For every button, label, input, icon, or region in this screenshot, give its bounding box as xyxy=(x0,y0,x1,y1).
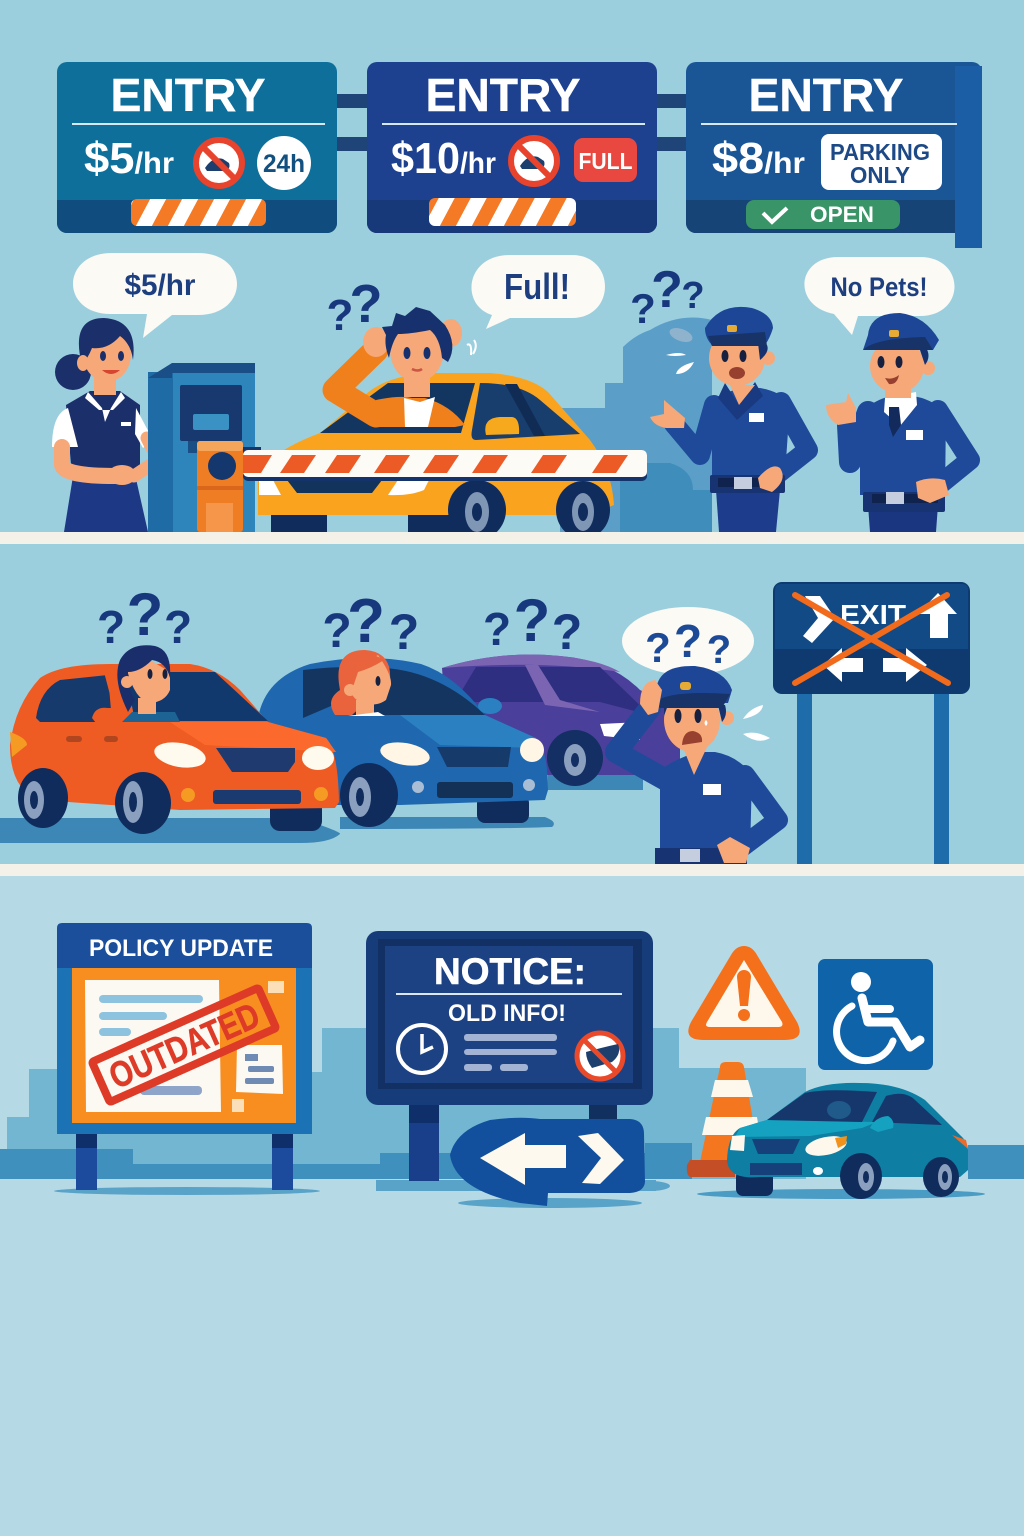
speech bubble: $5/hr xyxy=(73,253,237,338)
speech bubble: Full! xyxy=(471,255,605,329)
guard one xyxy=(650,307,808,532)
confused guard xyxy=(616,666,778,864)
question marks over driver: ? xyxy=(350,274,382,334)
orange car xyxy=(10,664,339,834)
notice board: OLD INFO! xyxy=(448,1000,566,1027)
thought bubble with question marks: ? xyxy=(674,615,702,667)
blue car xyxy=(258,658,548,827)
question marks over driver xyxy=(327,274,382,340)
teal car xyxy=(697,1083,985,1199)
thought bubble with question marks xyxy=(622,607,754,675)
background skyline bottom xyxy=(0,1028,1024,1179)
dark-haired driver xyxy=(117,645,180,722)
fallen direction sign xyxy=(450,1118,670,1208)
entry sign 3: $8/hr parking only: $8/hr xyxy=(712,134,805,183)
question marks over cars: ? xyxy=(97,601,125,653)
thought bubble with question marks: ? xyxy=(645,624,671,671)
question marks over cars: ? xyxy=(552,604,582,660)
question marks over cars: ? xyxy=(514,587,550,654)
question marks over guard one: ? xyxy=(651,261,683,319)
confused driver xyxy=(335,307,476,427)
entry sign 2: $10/hr: FULL xyxy=(578,148,632,174)
entry sign 1: $5/hr: 24h xyxy=(263,150,305,178)
entry sign 3: $8/hr parking only: PARKING xyxy=(830,139,930,165)
entry sign 2: $10/hr: ENTRY xyxy=(426,69,580,121)
entry sign 3: $8/hr parking only: OPEN xyxy=(810,202,874,227)
background building silhouette xyxy=(560,318,712,532)
question marks over guard one: ? xyxy=(630,285,656,332)
redhead passenger xyxy=(331,650,391,716)
barrier post xyxy=(197,441,261,532)
entry sign 3: $8/hr parking only: ENTRY xyxy=(748,69,904,121)
attendant woman xyxy=(52,318,158,532)
speech bubble: No Pets!: No Pets! xyxy=(830,272,928,302)
policy update board xyxy=(54,923,320,1195)
guard two xyxy=(826,313,970,532)
purple car xyxy=(442,654,680,786)
policy update board: POLICY UPDATE xyxy=(89,935,273,962)
question marks over cars: ? xyxy=(347,587,385,656)
policy update board: OUTDATED xyxy=(103,994,266,1097)
question marks over cars: ? xyxy=(389,604,419,660)
question marks over cars xyxy=(97,581,582,660)
thought bubble with question marks: ? xyxy=(707,628,731,672)
question marks over guard one xyxy=(630,261,705,332)
speech bubble: $5/hr: $5/hr xyxy=(124,269,196,302)
warning triangle xyxy=(688,946,800,1040)
speech bubble: No Pets! xyxy=(804,257,954,335)
crossed-out exit sign: EXIT xyxy=(840,599,906,630)
question marks over cars: ? xyxy=(483,603,511,655)
entry sign 3: $8/hr parking only xyxy=(686,62,982,248)
traffic cone xyxy=(687,1062,760,1177)
entry sign 2: $10/hr xyxy=(367,62,657,233)
question marks over cars: ? xyxy=(322,605,352,658)
question marks over cars: ? xyxy=(164,601,192,653)
barrier arm xyxy=(243,450,647,481)
entry sign 1: $5/hr xyxy=(57,62,337,233)
sign connectors xyxy=(335,94,688,151)
entry sign 1: $5/hr: $5/hr xyxy=(84,134,174,183)
entry sign 2: $10/hr: $10/hr xyxy=(391,134,496,183)
ground shadows middle panel xyxy=(0,770,643,843)
entry sign 1: $5/hr: ENTRY xyxy=(110,69,266,121)
yellow car xyxy=(258,373,614,540)
ticket kiosk xyxy=(148,363,255,532)
crossed-out exit sign xyxy=(773,582,970,864)
speech bubble: Full!: Full! xyxy=(504,266,570,307)
question marks over cars: ? xyxy=(127,581,163,648)
question marks over driver: ? xyxy=(327,291,353,340)
question marks over guard one: ? xyxy=(681,275,705,317)
notice board xyxy=(366,931,656,1191)
notice board: NOTICE: xyxy=(434,951,586,992)
accessibility sign xyxy=(818,959,933,1070)
entry sign 3: $8/hr parking only: ONLY xyxy=(850,162,910,188)
